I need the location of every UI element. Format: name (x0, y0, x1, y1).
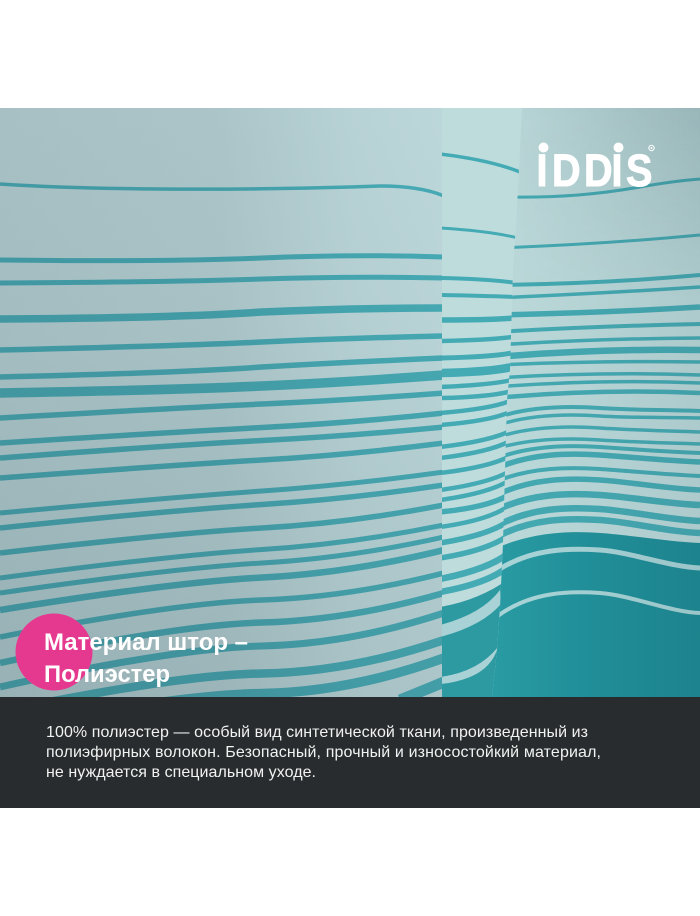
logo dots (538, 142, 624, 152)
heading: Полиэстер (44, 661, 170, 688)
panel: curtain photo (0, 108, 700, 730)
panel: right curtain fold (485, 108, 700, 697)
logo: IDDIS (537, 142, 654, 196)
panel: left curtain fold (0, 108, 444, 730)
logo wordmark: IDDIS (537, 146, 652, 196)
light bands on middle fold (440, 590, 501, 637)
description text (46, 724, 601, 781)
description text: полиэфирных волокон. Безопасный, прочный и износостойкий материал, (46, 744, 601, 761)
teal base of right fold (485, 532, 700, 697)
stripes: right fold (495, 179, 700, 538)
panel: middle curtain fold (442, 108, 522, 697)
stripes: left fold (0, 184, 444, 730)
heading: Материал штор – (44, 629, 248, 656)
panel: description band (0, 697, 700, 808)
stripes: middle fold (440, 154, 520, 592)
description text: 100% полиэстер — особый вид синтетической ткани, произведенный из (46, 724, 588, 741)
infographic canvas (0, 108, 700, 808)
light bands on right fold (495, 549, 700, 618)
teal base of middle fold (442, 584, 501, 697)
heading (44, 629, 248, 688)
logo registered mark (649, 145, 654, 151)
accent: pink circle (16, 614, 92, 690)
description text: не нуждается в специальном уходе. (46, 764, 316, 781)
